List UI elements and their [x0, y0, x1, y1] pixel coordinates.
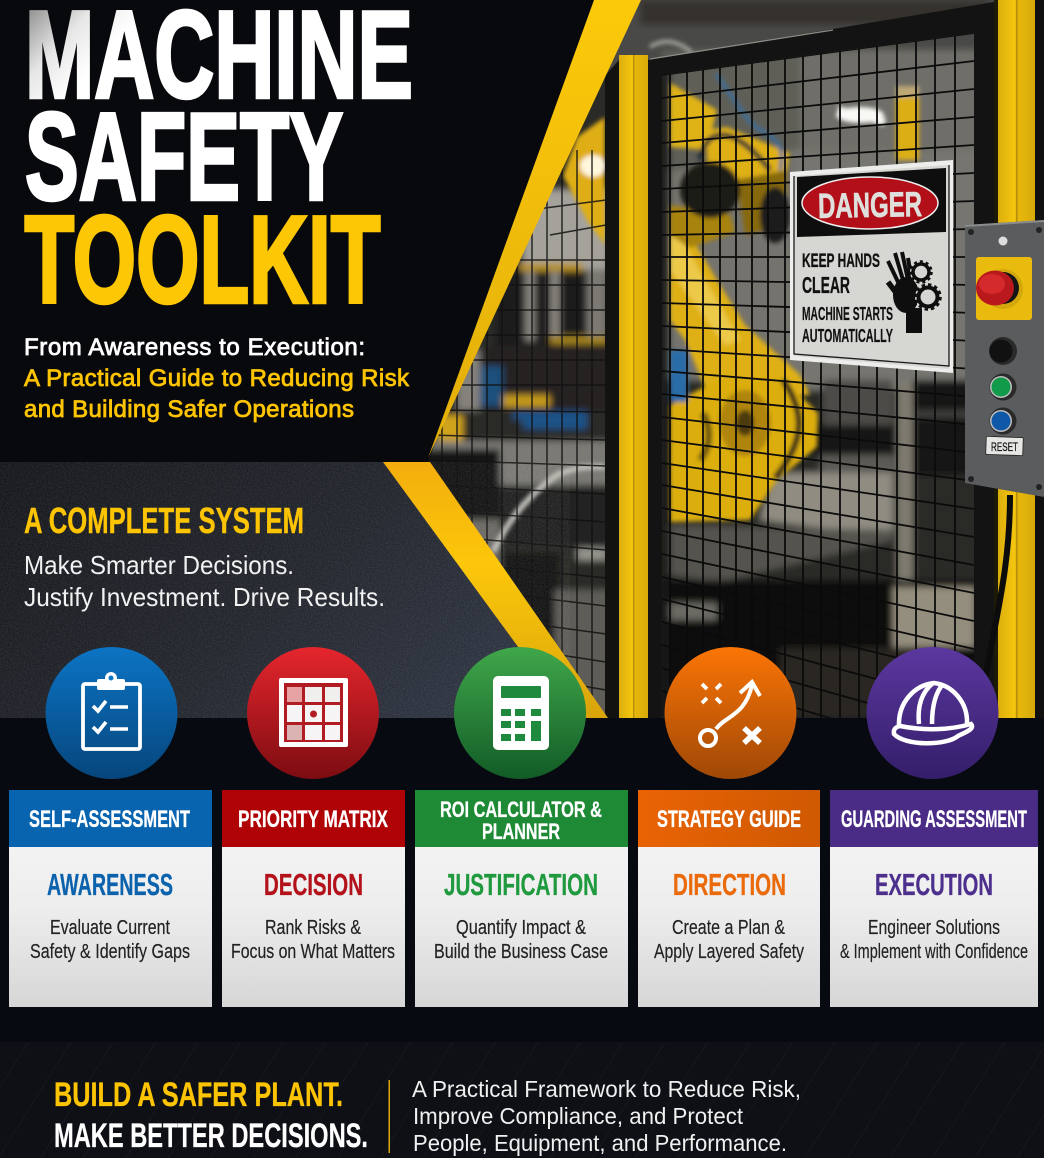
footer text: A Practical Framework to Reduce Risk, [412, 1076, 801, 1102]
buttons [989, 337, 1017, 434]
card: strategy guide: Create a Plan & [672, 916, 785, 939]
subtitle [24, 334, 410, 423]
card: roi calculator and planner: JUSTIFICATION [444, 867, 598, 902]
card: roi calculator and planner: Build the Business Case [434, 940, 608, 963]
back mesh [430, 150, 606, 718]
card: self-assessment: AWARENESS [47, 867, 173, 902]
guard mesh [662, 30, 974, 789]
yellow diagonal stripe: system [383, 462, 608, 718]
card: self-assessment [9, 790, 212, 1007]
footer headline: BUILD A SAFER PLANT. [54, 1076, 343, 1114]
danger sign: DANGER [818, 185, 922, 226]
card: strategy guide: STRATEGY GUIDE [657, 806, 801, 833]
subtitle: A Practical Guide to Reducing Risk [24, 365, 410, 392]
text block: system tagline: Make Smarter Decisions. [24, 550, 294, 580]
card: roi calculator and planner: Quantify Impact & [456, 916, 586, 939]
emergency stop [976, 257, 1032, 320]
reset label [986, 436, 1023, 456]
card: self-assessment: SELF-ASSESSMENT [29, 806, 190, 833]
left black post [605, 60, 619, 718]
cable [994, 495, 1013, 646]
reset label: RESET [991, 440, 1018, 454]
danger sign: KEEP HANDS [802, 250, 880, 272]
card: strategy guide: Apply Layered Safety [654, 940, 805, 963]
title [24, 0, 413, 330]
card: priority matrix: Rank Risks & [265, 916, 361, 939]
card: self-assessment: Evaluate Current [50, 916, 170, 939]
right yellow post [998, 0, 1035, 718]
title: SAFETY [25, 88, 343, 226]
text block: system tagline: Justify Investment. Drive Results. [24, 582, 385, 612]
danger sign: CLEAR [802, 272, 850, 298]
footer text [412, 1076, 801, 1156]
panel: a complete system backdrop [0, 462, 570, 718]
danger sign: AUTOMATICALLY [802, 325, 893, 346]
text block: system tagline [24, 550, 385, 612]
photo: robot cell behind guarding [420, 0, 1044, 789]
footer text: Improve Compliance, and Protect [413, 1103, 744, 1129]
card: priority matrix: Focus on What Matters [231, 940, 395, 963]
card: strategy guide [638, 790, 820, 1007]
footer headline [54, 1076, 368, 1155]
card: guarding assessment [830, 790, 1038, 1007]
card: roi calculator and planner [415, 790, 628, 1007]
card: priority matrix: DECISION [264, 867, 363, 902]
subtitle: From Awareness to Execution: [24, 334, 365, 361]
card: priority matrix [222, 790, 405, 1007]
black frame [648, 2, 996, 718]
card: priority matrix: PRIORITY MATRIX [238, 806, 388, 833]
card: roi calculator and planner: ROI CALCULATOR & [440, 797, 602, 822]
danger sign [790, 160, 953, 373]
icon: strategy play [664, 647, 796, 779]
danger sign: MACHINE STARTS [802, 303, 893, 324]
icon: hard hat [866, 647, 998, 779]
subtitle: and Building Safer Operations [24, 396, 354, 423]
card: self-assessment: Safety & Identify Gaps [30, 940, 190, 963]
blurred factory background [426, 0, 994, 718]
footer text: People, Equipment, and Performance. [413, 1130, 787, 1156]
panel: title area [0, 0, 597, 462]
title: TOOLKIT [24, 192, 380, 330]
robot arm [493, 42, 919, 552]
card: roi calculator and planner: PLANNER [482, 819, 560, 844]
icon: calculator [454, 647, 586, 779]
yellow diagonal stripe: title [428, 0, 641, 458]
icon: clipboard [46, 647, 178, 779]
card: guarding assessment: Engineer Solutions [868, 916, 1000, 939]
panel: footer [0, 1042, 1044, 1158]
control panel [965, 220, 1044, 497]
icon: hand and gears [888, 252, 941, 333]
heading: a complete system: A COMPLETE SYSTEM [24, 500, 304, 541]
icon: priority matrix [247, 647, 379, 779]
lower dark band [0, 718, 1044, 1158]
footer headline: MAKE BETTER DECISIONS. [54, 1117, 368, 1155]
yellow post [619, 55, 648, 718]
card: strategy guide: DIRECTION [673, 867, 786, 902]
